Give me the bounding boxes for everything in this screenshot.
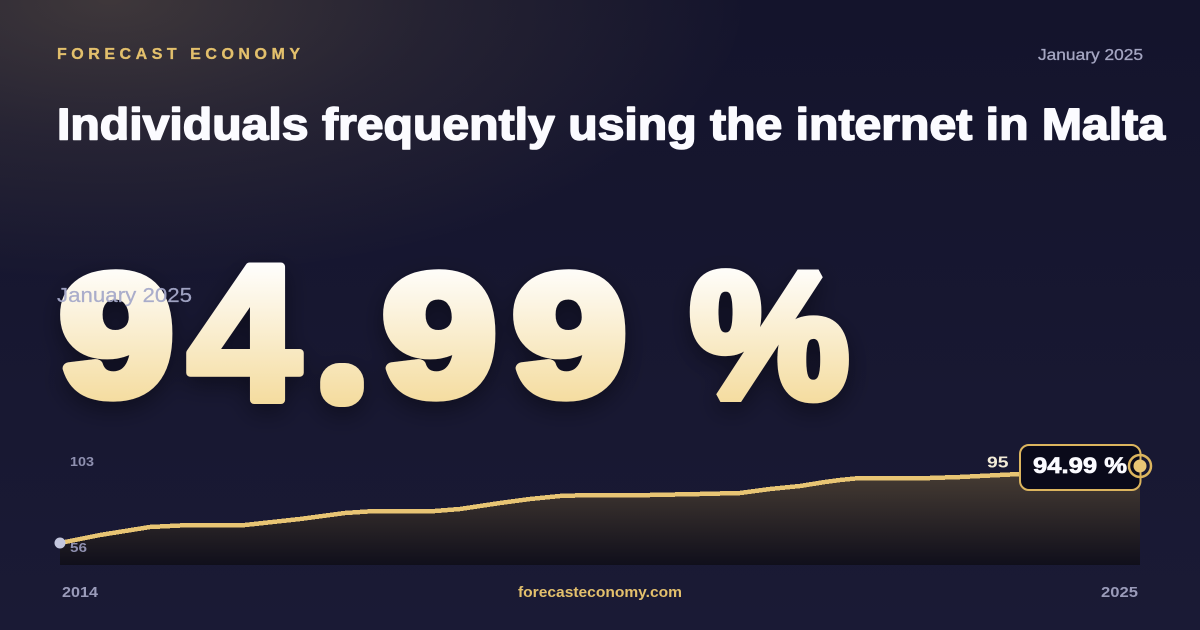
axis max: 103 xyxy=(70,454,94,469)
big value: % xyxy=(690,236,849,435)
line chart xyxy=(54,445,1151,565)
end value label: 95 xyxy=(987,454,1009,472)
big value: 4 xyxy=(187,225,301,442)
chart line xyxy=(60,466,1140,543)
big value: 9 xyxy=(60,240,173,430)
big value: . xyxy=(336,353,348,397)
value badge xyxy=(1020,445,1140,490)
big value: 9 xyxy=(383,240,496,430)
year start: 2014 xyxy=(62,584,99,601)
value badge: 94.99 % xyxy=(1033,453,1127,478)
axis min: 56 xyxy=(70,540,87,555)
start dot xyxy=(54,538,66,548)
date overlay: January 2025 xyxy=(57,285,192,307)
title: Individuals frequently using the internet in Malta xyxy=(57,100,1166,150)
year end: 2025 xyxy=(1101,584,1138,601)
big value xyxy=(60,225,849,442)
brand label: FORECAST ECONOMY xyxy=(57,46,300,63)
chart area xyxy=(60,466,1140,565)
end marker xyxy=(1129,455,1151,477)
date top right: January 2025 xyxy=(1038,47,1143,64)
big value: 9 xyxy=(513,240,626,430)
website: forecasteconomy.com xyxy=(518,584,682,601)
